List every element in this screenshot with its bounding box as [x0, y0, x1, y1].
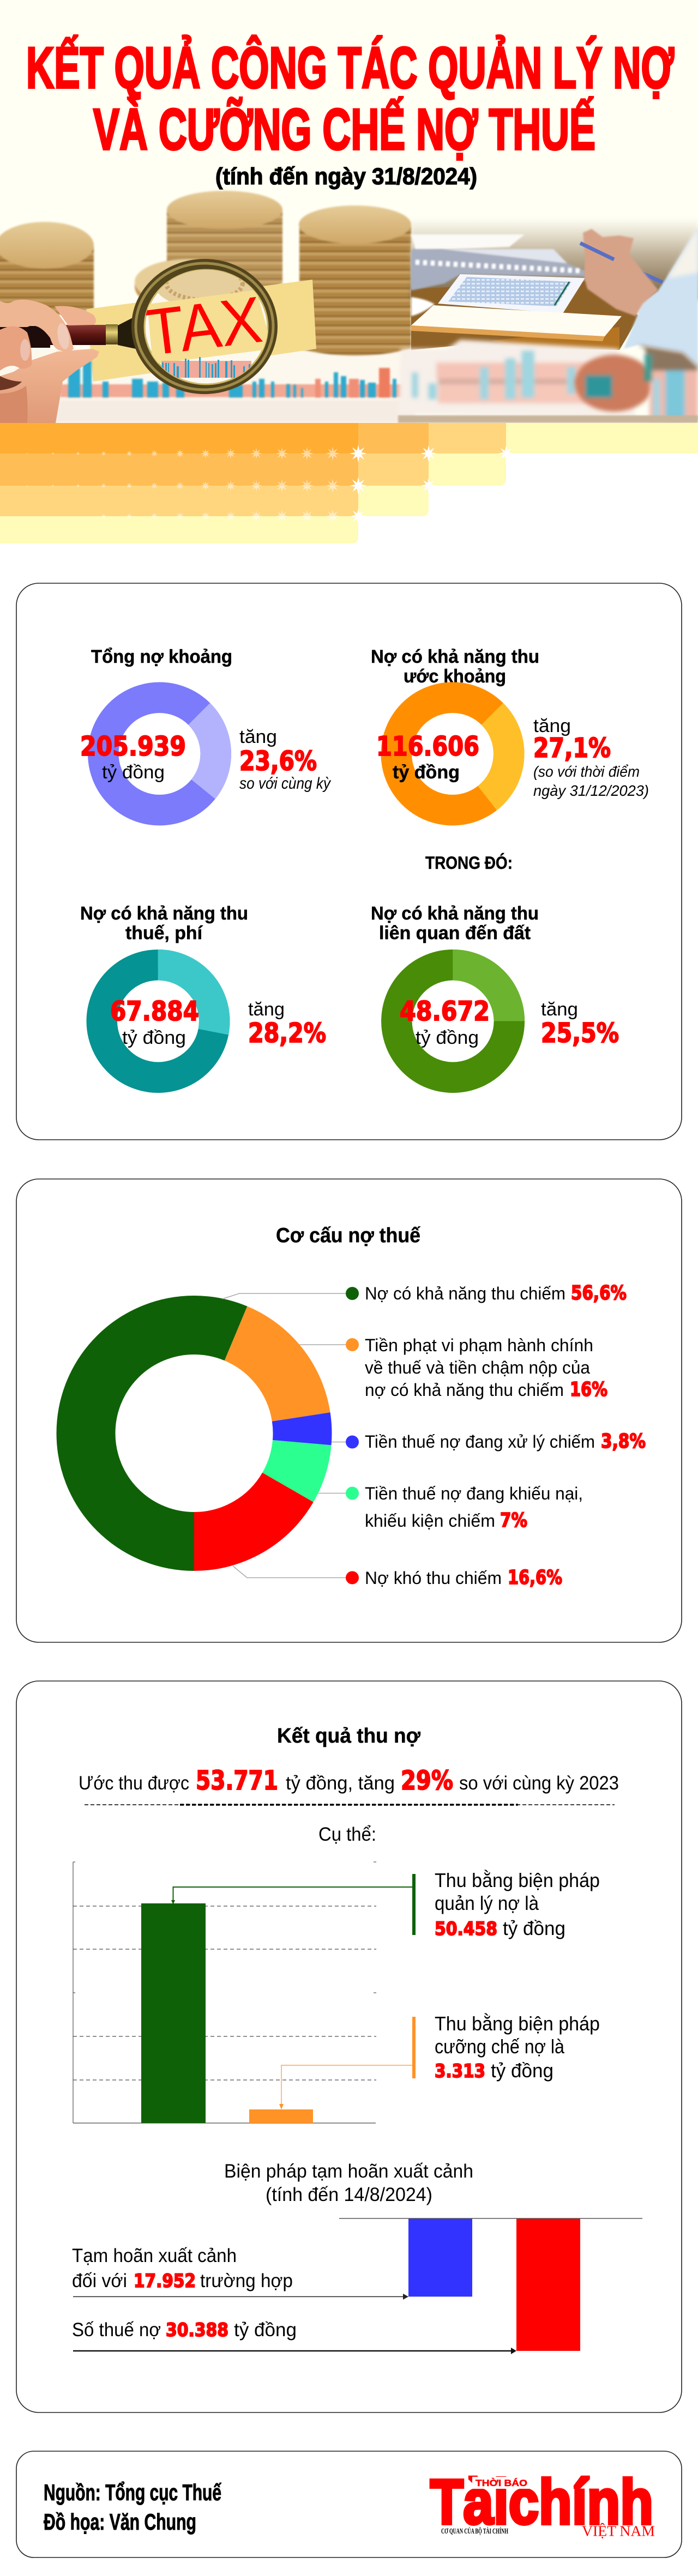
value: land related: tỷ đồng	[416, 1027, 479, 1048]
panel: debt structure	[16, 1179, 682, 1642]
change: collectible debt	[533, 716, 649, 799]
word TAX: TAX	[142, 283, 266, 370]
heading: tax and fees: Nợ có khả năng thu	[80, 903, 248, 924]
heading: total debt: Tổng nợ khoảng	[91, 646, 232, 667]
heading: debt structure: Cơ cấu nợ thuế	[276, 1224, 421, 1247]
callout: enforcement measures: cưỡng chế nợ là	[435, 2035, 565, 2058]
decorative orange stripes	[0, 423, 698, 543]
panel: debt collection results	[16, 1681, 682, 2412]
summary sentence: tỷ đồng, tăng	[286, 1773, 395, 1794]
binder	[411, 249, 585, 291]
heading: collectible debt: Nợ có khả năng thu	[371, 646, 539, 667]
panel: source and credit	[16, 2451, 682, 2557]
callout: enforcement measures: tỷ đồng	[491, 2059, 553, 2082]
coin stack right	[299, 205, 411, 355]
value: tax and fees: tỷ đồng	[122, 1027, 186, 1048]
label: cases: đối với	[72, 2270, 127, 2291]
donut: tax and fees	[102, 965, 214, 1078]
heading: collection results: Kết quả thu nợ	[277, 1725, 421, 1747]
paper in the lens	[147, 290, 273, 364]
change: tax and fees	[248, 999, 326, 1049]
value: tax and fees	[110, 996, 199, 1048]
value: land related: 48.672	[400, 996, 490, 1027]
summary sentence: 53.771	[196, 1765, 278, 1796]
callout: enforcement measures	[412, 2012, 600, 2082]
graphics credit: Đồ họa: Văn Chung	[44, 2509, 196, 2535]
bar: tax debt	[516, 2218, 580, 2351]
change: land related: 25,5%	[541, 1018, 619, 1049]
summary sentence	[79, 1765, 619, 1796]
label: tax debt	[72, 2319, 297, 2341]
bar: management measures	[141, 1903, 206, 2123]
heading: collectible debt	[371, 646, 539, 687]
legend: being processed: Tiền thuế nợ đang xử lý chiếm	[365, 1432, 595, 1452]
panel: debt totals	[16, 583, 682, 1140]
heading: land related: liên quan đến đất	[379, 923, 531, 944]
notebook	[411, 305, 622, 341]
callout: enforcement measures: 3.313	[435, 2060, 485, 2082]
small chart in the lens	[161, 357, 251, 378]
value: total debt	[80, 731, 186, 783]
legend: collectible debt: 56,6%	[571, 1282, 627, 1304]
donut chart: debt structure	[46, 1285, 342, 1581]
label: tax debt: 30.388	[166, 2319, 228, 2341]
donut: total debt	[80, 674, 239, 833]
change: total debt: so với cùng kỳ	[239, 775, 332, 793]
summary sentence: so với cùng kỳ 2023	[459, 1773, 619, 1794]
legend: under complaint: 7%	[500, 1509, 527, 1532]
pen over the hand	[580, 243, 614, 259]
change: collectible debt: tăng	[533, 716, 571, 736]
callout: management measures: Thu bằng biện pháp	[435, 1869, 600, 1891]
legend: penalties: Tiền phạt vi phạm hành chính	[365, 1335, 593, 1355]
bar: cases	[408, 2218, 472, 2297]
value: total debt: 205.939	[80, 731, 186, 762]
date subtitle: (tính đến ngày 31/8/2024)	[215, 164, 477, 190]
label: cases: trường hợp	[200, 2270, 293, 2291]
legend: under complaint	[317, 1484, 583, 1532]
label: tax debt: Số thuế nợ	[72, 2319, 161, 2341]
value: tax and fees: 67.884	[110, 996, 199, 1027]
legend: collectible debt	[222, 1282, 627, 1304]
title	[26, 35, 674, 190]
legend: hard to collect: 16,6%	[508, 1567, 562, 1589]
small coin behind the lens	[133, 258, 203, 298]
lower blurred document	[398, 340, 636, 417]
change: total debt: tăng	[239, 727, 277, 747]
label: cases: 17.952	[134, 2270, 196, 2292]
callout: management measures: 50.458	[435, 1918, 497, 1940]
logo: CƠ QUAN CỦA BỘ TÀI CHÍNH	[441, 2527, 508, 2535]
value: total debt: tỷ đồng	[102, 762, 165, 783]
bar chart: collection methods	[73, 1862, 414, 2123]
label: cases	[72, 2245, 293, 2292]
heading: land related: Nợ có khả năng thu	[371, 903, 539, 924]
coin in the lens	[157, 270, 253, 301]
magnifying glass lens	[131, 258, 278, 394]
label: cases: Tạm hoãn xuất cảnh	[72, 2245, 237, 2266]
white curve near coin stack	[411, 297, 435, 316]
lower hand blurred	[575, 355, 653, 412]
donut: land related	[396, 965, 509, 1078]
change: tax and fees: 28,2%	[248, 1018, 326, 1049]
arrow: to orange bar	[279, 2065, 414, 2109]
heading: exit suspension: Biện pháp tạm hoãn xuất cảnh	[224, 2161, 473, 2182]
heading: land related	[371, 903, 539, 944]
arrow: to red bar	[73, 2348, 516, 2354]
paper sheet top	[411, 234, 525, 251]
legend: penalties: về thuế và tiền chậm nộp của	[365, 1358, 590, 1377]
summary sentence: Ước thu được	[79, 1773, 189, 1794]
yellow TAX paper	[87, 280, 316, 382]
callout: management measures: tỷ đồng	[503, 1917, 565, 1939]
pen behind the hand	[641, 271, 663, 285]
change: collectible debt: ngày 31/12/2023)	[533, 782, 649, 799]
arrow: to blue bar	[73, 2294, 408, 2300]
legend: under complaint: Tiền thuế nợ đang khiếu nại,	[365, 1484, 583, 1503]
change: land related	[541, 999, 619, 1049]
heading: exit suspension: (tính đến 14/8/2024)	[266, 2184, 432, 2205]
legend: penalties: 16%	[570, 1378, 607, 1401]
value: collectible debt: 116.606	[376, 731, 479, 762]
label: tax debt: tỷ đồng	[234, 2319, 297, 2341]
logo: THỜI BÁO	[476, 2478, 527, 2488]
bar chart: exit suspension	[339, 2218, 642, 2351]
bar: enforcement measures	[249, 2109, 313, 2123]
summary sentence: 29%	[401, 1765, 453, 1796]
label: details: Cụ thể:	[318, 1824, 376, 1845]
callout: management measures	[412, 1869, 600, 1940]
desk wood and background fade on the right	[411, 218, 698, 350]
change: tax and fees: tăng	[248, 999, 285, 1020]
legend: hard to collect	[233, 1566, 562, 1589]
legend: penalties: nợ có khả năng thu chiếm	[365, 1380, 564, 1400]
change: collectible debt: 27,1%	[533, 733, 611, 764]
value: land related	[400, 996, 490, 1048]
source: Nguồn: Tổng cục Thuế	[44, 2480, 221, 2505]
writing hand	[583, 229, 658, 316]
magnifying glass handle	[0, 316, 136, 349]
legend: collectible debt: Nợ có khả năng thu chiếm	[365, 1284, 565, 1303]
legend: being processed	[332, 1430, 646, 1453]
shirt	[624, 227, 698, 367]
legend: under complaint: khiếu kiện chiếm	[365, 1511, 495, 1531]
donut: collectible debt	[373, 674, 532, 833]
change: land related: tăng	[541, 999, 578, 1020]
heading: tax and fees: thuế, phí	[125, 923, 203, 944]
legend: penalties	[299, 1335, 607, 1401]
blurred bar chart left	[68, 361, 396, 397]
change: collectible debt: (so với thời điểm	[533, 763, 640, 780]
logo: VIỆT NAM	[582, 2523, 655, 2539]
table and chart background on the left	[56, 383, 411, 423]
value: collectible debt	[376, 731, 479, 783]
coin stack middle	[167, 191, 282, 294]
change: total debt: 23,6%	[239, 746, 317, 777]
callout: enforcement measures: Thu bằng biện pháp	[435, 2012, 600, 2035]
logo: Tàichính	[430, 2466, 653, 2537]
spreadsheet page	[438, 274, 585, 313]
change: total debt	[239, 727, 332, 793]
legend: hard to collect: Nợ khó thu chiếm	[365, 1568, 502, 1588]
callout: management measures: quản lý nợ là	[435, 1892, 539, 1914]
legend: being processed: 3,8%	[601, 1430, 646, 1453]
coin stack left	[0, 222, 94, 315]
value: collectible debt: tỷ đồng	[393, 762, 460, 783]
hand holding the magnifier	[0, 300, 99, 423]
cuff and right chart block	[638, 345, 698, 421]
hero image: coins, magnifier and desk	[0, 191, 698, 423]
heading: exit suspension	[224, 2161, 473, 2205]
desk edge bottom	[398, 415, 698, 423]
heading: tax and fees	[80, 903, 248, 944]
arrow: to green bar	[171, 1887, 414, 1904]
heading: collectible debt: ước khoảng	[404, 666, 506, 687]
subheading: TRONG ĐÓ:	[425, 853, 513, 873]
